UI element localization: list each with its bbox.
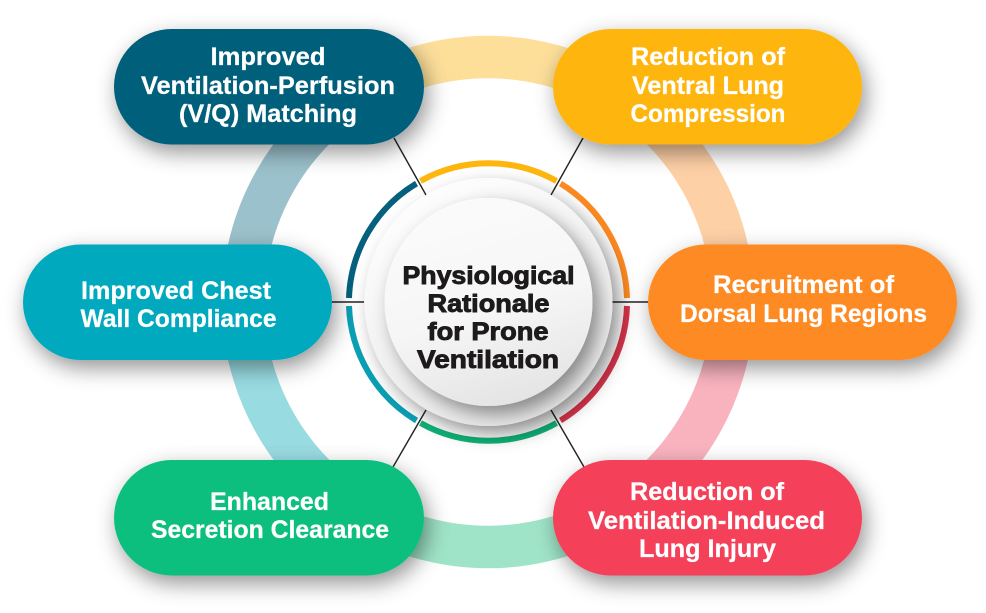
- pill: Reduction of Ventilation-Induced Lung Injury: Lung Injury: [639, 535, 776, 563]
- pill: Reduction of Ventral Lung Compression: Reduction of: [631, 43, 786, 71]
- middle disc: [364, 178, 612, 426]
- pill: Enhanced Secretion Clearance: Secretion Clearance: [151, 516, 389, 544]
- center title: Physiological: [402, 262, 574, 290]
- pill: Recruitment of Dorsal Lung Regions: Dorsal Lung Regions: [680, 300, 927, 328]
- pill: Recruitment of Dorsal Lung Regions: [648, 244, 957, 360]
- pill: Reduction of Ventral Lung Compression: Ventral Lung: [632, 72, 784, 100]
- pill: Reduction of Ventilation-Induced Lung Injury: [553, 460, 862, 576]
- pill: Improved Chest Wall Compliance: Wall Compliance: [80, 305, 277, 333]
- pill: Reduction of Ventilation-Induced Lung Injury: Ventilation-Induced: [588, 507, 825, 535]
- outer ring: [243, 57, 733, 547]
- inner colored arc ring: [349, 163, 627, 441]
- center title: for Prone: [428, 318, 549, 346]
- center disc with title: [384, 198, 592, 406]
- pill: Reduction of Ventilation-Induced Lung Injury: Reduction of: [630, 478, 785, 506]
- pill: Improved Ventilation-Perfusion (V/Q) Matching: Improved: [210, 43, 326, 71]
- center title: [402, 262, 574, 374]
- pill: Improved Ventilation-Perfusion (V/Q) Matching: (V/Q) Matching: [179, 100, 357, 128]
- pill: Reduction of Ventral Lung Compression: Compression: [630, 100, 786, 128]
- center title: Rationale: [428, 290, 550, 318]
- center title: Ventilation: [417, 346, 559, 374]
- pill: Reduction of Ventral Lung Compression: [553, 29, 862, 144]
- pill: Enhanced Secretion Clearance: Enhanced: [210, 488, 329, 516]
- pill: Improved Ventilation-Perfusion (V/Q) Matching: Ventilation-Perfusion: [141, 72, 395, 100]
- pill: Recruitment of Dorsal Lung Regions: Recruitment of: [713, 271, 895, 299]
- pill: Improved Chest Wall Compliance: [23, 244, 332, 360]
- pill: Improved Ventilation-Perfusion (V/Q) Matching: [114, 29, 424, 144]
- pill: Enhanced Secretion Clearance: [114, 460, 424, 576]
- pill: Improved Chest Wall Compliance: Improved Chest: [81, 277, 272, 305]
- connector lines: [332, 138, 648, 467]
